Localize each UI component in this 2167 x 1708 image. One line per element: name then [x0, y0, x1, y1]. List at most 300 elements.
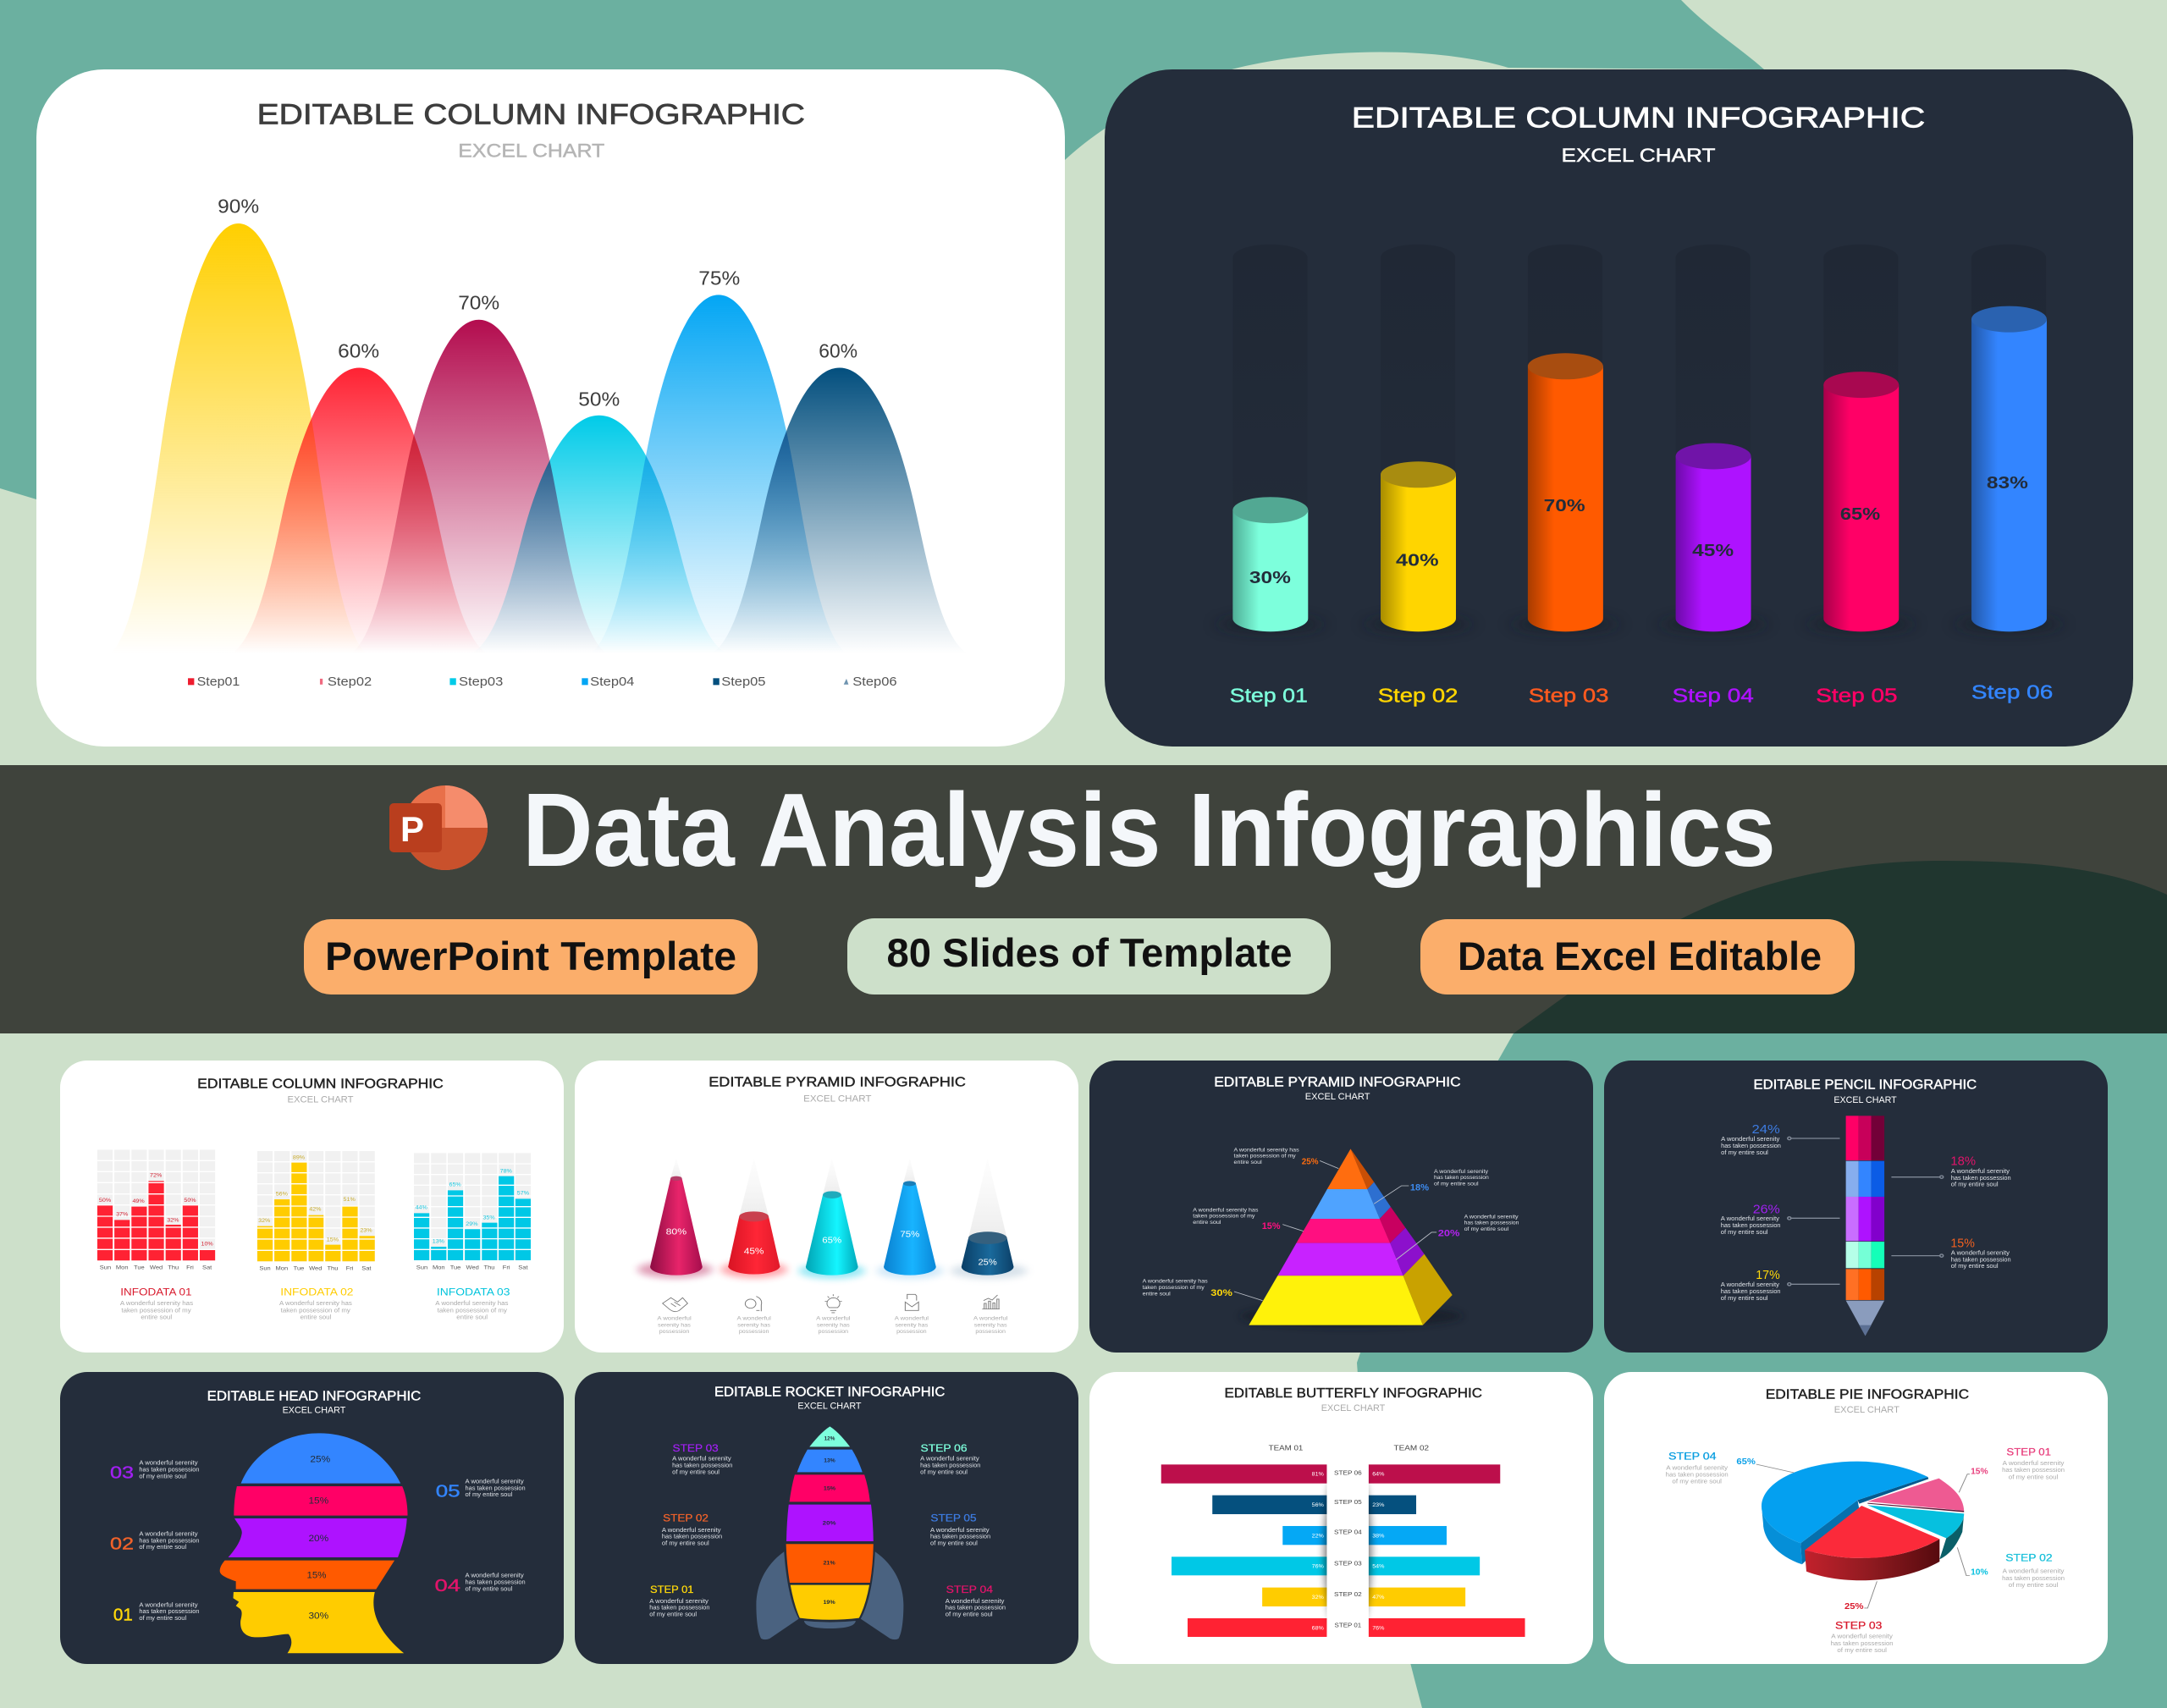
panel: weekly column charts [60, 1061, 564, 1353]
percent labels: 25% [1844, 1602, 1864, 1612]
cone: 65% [806, 1158, 858, 1275]
head: layered silhouette: 30% [308, 1612, 328, 1621]
icon: PowerPoint logo [389, 785, 488, 870]
descriptions: has taken possession [649, 1604, 709, 1611]
step headings: STEP 02 [663, 1512, 709, 1523]
chart: infodata 03: Thu [484, 1265, 495, 1270]
leader lines [1756, 1464, 1970, 1608]
descriptions: of my entire soul [662, 1540, 709, 1546]
subtitle: panel 2: EXCEL CHART [1561, 145, 1716, 166]
descriptions: has taken possession [139, 1537, 200, 1544]
text block: infodata 02 [279, 1286, 353, 1320]
rocket: body segments: 12% [824, 1435, 835, 1441]
cone shadows [637, 1261, 1028, 1279]
descriptions: A wonderful serenity [1831, 1633, 1893, 1639]
descriptions: of my entire soul [1672, 1478, 1722, 1485]
cylinder: step 02: 40% [1396, 551, 1439, 570]
subtitle: EXCEL CHART [1833, 1094, 1897, 1105]
captions under icons: serenity has [658, 1323, 691, 1328]
cylinder: step 05: 65% [1840, 504, 1880, 524]
text block: infodata 02: A wonderful serenity has [279, 1300, 352, 1307]
banner: title band [0, 765, 2167, 1033]
cylinder: step 06 [1971, 306, 2047, 631]
step headings [1668, 1446, 2053, 1631]
descriptions: has taken possession [2002, 1575, 2065, 1582]
text block: infodata 02: taken possession of my [281, 1307, 350, 1314]
panel: bell curve column chart [36, 69, 1065, 747]
descriptions: entire soul [1234, 1159, 1262, 1165]
chart: butterfly bars: 76% [1372, 1626, 1385, 1631]
descriptions: has taken possession [930, 1533, 990, 1540]
captions under icons: A wonderful [736, 1316, 771, 1321]
chart: butterfly bars: 47% [1372, 1595, 1385, 1601]
button: 80 Slides of Template [847, 918, 1331, 994]
percent labels: 30% [1210, 1287, 1232, 1298]
descriptions: A wonderful serenity [1951, 1249, 2010, 1256]
head: layered silhouette: 15% [306, 1571, 326, 1580]
cylinder shadows [1218, 615, 2060, 633]
panel: head chart [60, 1372, 564, 1664]
chart: butterfly bars: 68% [1312, 1626, 1324, 1631]
chart: butterfly bars: STEP 01 [1335, 1621, 1361, 1628]
chart: infodata 03: 44% [416, 1205, 427, 1210]
chart: butterfly bars: 81% [1312, 1472, 1324, 1477]
rocket: fins and nozzle [756, 1551, 903, 1639]
chart: infodata 03: Wed [466, 1265, 479, 1270]
descriptions: taken possession of my [1143, 1284, 1205, 1291]
chart: butterfly bars: STEP 04 [1334, 1528, 1362, 1535]
percent labels: 26% [1753, 1203, 1780, 1216]
descriptions: of my entire soul [1837, 1647, 1887, 1654]
background: lower teal shape [1357, 1033, 2167, 1708]
descriptions: has taken possession [920, 1462, 980, 1468]
percent labels: 65% [1736, 1457, 1756, 1467]
pie: 3D slices [1762, 1462, 1964, 1580]
descriptions: taken possession of my [1234, 1152, 1296, 1159]
chart: infodata 01: 72% [150, 1173, 162, 1178]
step labels: Step 01 [1230, 684, 1308, 706]
percent labels [1210, 1157, 1459, 1298]
descriptions: of my entire soul [139, 1544, 186, 1551]
rocket: body segments: 21% [823, 1559, 835, 1566]
descriptions: A wonderful serenity [139, 1601, 198, 1608]
subtitle: EXCEL CHART [288, 1094, 354, 1105]
legend: Step04 [590, 674, 634, 688]
captions under icons: possession [739, 1329, 769, 1335]
descriptions: has taken possession [139, 1608, 200, 1615]
chart: butterfly bars: 23% [1372, 1502, 1385, 1508]
panel: 3D cylinder column chart [1105, 69, 2133, 747]
chart: butterfly bars [1161, 1447, 1525, 1653]
chart: infodata 01: 50% [99, 1198, 111, 1204]
chart: infodata 02: Mon [276, 1266, 288, 1271]
head: layered silhouette: 20% [308, 1534, 328, 1544]
subtitle: EXCEL CHART [797, 1401, 862, 1411]
cylinder: step 03 [1528, 353, 1603, 631]
title: EDITABLE PIE INFOGRAPHIC [1766, 1386, 1969, 1402]
title: EDITABLE PYRAMID INFOGRAPHIC [1214, 1074, 1461, 1089]
panel: pencil chart [1604, 1061, 2108, 1353]
text block: infodata 02: entire soul [301, 1314, 332, 1320]
head: layered silhouette: 15% [308, 1496, 328, 1506]
step numbers [110, 1463, 460, 1624]
descriptions: A wonderful serenity [1721, 1281, 1779, 1288]
descriptions: A wonderful serenity [2003, 1460, 2064, 1467]
text block: infodata 03: INFODATA 03 [437, 1286, 510, 1298]
descriptions: of my entire soul [2009, 1582, 2059, 1589]
subtitle: EXCEL CHART [1321, 1402, 1386, 1413]
cone: 25%: 25% [979, 1258, 997, 1267]
rocket: body segments: 20% [823, 1519, 836, 1526]
cone: 75% [884, 1158, 936, 1275]
descriptions: has taken possession [1434, 1174, 1489, 1181]
captions under icons: serenity has [974, 1323, 1007, 1328]
captions under icons: serenity has [895, 1323, 929, 1328]
cylinder: step 04 [1676, 443, 1751, 631]
percent labels: 18% [1950, 1154, 1976, 1168]
step headings [650, 1442, 993, 1595]
connector lines [1788, 1137, 1944, 1286]
chart: infodata 02: Fri [346, 1266, 354, 1271]
descriptions: A wonderful serenity [946, 1598, 1004, 1605]
pyramid: layered 3D shape [1249, 1149, 1453, 1325]
captions under icons: A wonderful [973, 1316, 1008, 1321]
chart: infodata 01: Thu [168, 1265, 179, 1270]
percent labels [1752, 1122, 1976, 1282]
cylinder tracks [1232, 245, 2046, 617]
legend: Step06 [852, 674, 897, 688]
title: EDITABLE ROCKET INFOGRAPHIC [714, 1384, 945, 1399]
chart: infodata 02: 15% [327, 1237, 339, 1242]
chart: infodata 02: Wed [309, 1266, 323, 1271]
percent labels: 25% [1302, 1157, 1319, 1166]
chart: butterfly bars: STEP 05 [1334, 1498, 1362, 1506]
percent labels: 10% [1971, 1568, 1988, 1577]
chart: infodata 01: Mon [116, 1265, 129, 1270]
captions under icons: possession [896, 1329, 927, 1335]
descriptions: of my entire soul [466, 1491, 512, 1498]
text block: infodata 03: A wonderful serenity has [435, 1300, 509, 1307]
descriptions: has taken possession [466, 1485, 526, 1491]
chart: infodata 01: Sun [100, 1265, 111, 1270]
cone: 25% [962, 1158, 1013, 1275]
chart: infodata 01: 10% [201, 1242, 213, 1247]
percent labels: 20% [1438, 1228, 1459, 1238]
subtitle: EXCEL CHART [1305, 1091, 1370, 1102]
chart: infodata 02: Sun [259, 1266, 271, 1271]
descriptions: has taken possession [1464, 1219, 1519, 1226]
percent labels: 15% [1971, 1467, 1988, 1476]
chart: infodata 01: 37% [116, 1212, 128, 1217]
descriptions: of my entire soul [946, 1611, 993, 1617]
chart: infodata 02: 89% [293, 1155, 305, 1160]
chart: infodata 03: Sat [518, 1265, 528, 1270]
chart value labels: 60% [819, 339, 857, 361]
chart: infodata 02 [257, 1151, 375, 1271]
descriptions: A wonderful serenity [1434, 1168, 1488, 1175]
percent labels [1736, 1457, 1988, 1612]
step headings: STEP 01 [2006, 1446, 2051, 1457]
cylinder: step 05 [1823, 372, 1899, 631]
descriptions: A wonderful serenity [1951, 1168, 2010, 1175]
descriptions: has taken possession [1721, 1222, 1781, 1229]
descriptions: A wonderful serenity [1464, 1213, 1519, 1220]
title: EDITABLE BUTTERFLY INFOGRAPHIC [1224, 1385, 1482, 1401]
descriptions: of my entire soul [1951, 1181, 1999, 1187]
captions under icons: possession [659, 1329, 689, 1335]
step headings: STEP 01 [650, 1584, 693, 1595]
legend: Step02 [328, 674, 372, 688]
descriptions: A wonderful serenity [672, 1455, 731, 1462]
step labels: Step 05 [1816, 684, 1898, 706]
descriptions: entire soul [1143, 1290, 1171, 1297]
descriptions: of my entire soul [2009, 1474, 2059, 1480]
descriptions: A wonderful serenity [649, 1598, 709, 1605]
title: EDITABLE COLUMN INFOGRAPHIC [197, 1076, 444, 1091]
descriptions: has taken possession [1951, 1256, 2011, 1263]
captions under icons: serenity has [737, 1323, 771, 1328]
button: Data Excel Editable [1420, 919, 1855, 994]
panel: rocket chart [575, 1372, 1078, 1664]
descriptions: A wonderful serenity [466, 1572, 524, 1579]
chart: butterfly bars: 38% [1372, 1534, 1385, 1539]
captions under icons: A wonderful [816, 1316, 851, 1321]
chart: infodata 01: 32% [167, 1218, 179, 1223]
descriptions: has taken possession [1666, 1471, 1729, 1478]
panel: butterfly chart [1089, 1372, 1593, 1664]
descriptions: has taken possession [946, 1604, 1006, 1611]
button: Data Excel Editable: Data Excel Editable [1458, 934, 1822, 978]
step numbers: 01 [113, 1604, 133, 1624]
pencil: segmented column [1846, 1116, 1884, 1336]
descriptions: A wonderful serenity has [1234, 1146, 1299, 1153]
chart: infodata 02: Sat [361, 1266, 372, 1271]
chart: infodata 03: Fri [503, 1265, 510, 1270]
descriptions [649, 1455, 1006, 1617]
descriptions: has taken possession [466, 1579, 526, 1585]
icon: PowerPoint logo: P [400, 809, 424, 849]
chart value labels: 50% [578, 388, 620, 410]
descriptions: of my entire soul [672, 1468, 720, 1475]
percent labels: 15% [1262, 1220, 1280, 1231]
chart: infodata 01: Fri [186, 1265, 194, 1270]
subtitle: EXCEL CHART [1834, 1404, 1900, 1415]
descriptions [1721, 1136, 2011, 1302]
chart: infodata 01: Wed [150, 1265, 163, 1270]
descriptions [139, 1459, 526, 1622]
descriptions: A wonderful serenity [1721, 1136, 1779, 1143]
text block: infodata 01 [120, 1286, 193, 1320]
step numbers: 03 [110, 1463, 134, 1482]
team headers: TEAM 02 [1394, 1444, 1429, 1452]
chart: butterfly bars: 22% [1312, 1534, 1324, 1539]
descriptions: entire soul [1193, 1219, 1221, 1226]
chart: infodata 01: Sat [202, 1265, 212, 1270]
cone: 45% [728, 1158, 780, 1275]
cone: 65%: 65% [822, 1236, 841, 1245]
chart value labels: 70% [458, 291, 499, 314]
descriptions: A wonderful serenity [1721, 1215, 1779, 1222]
descriptions: of my entire soul [139, 1473, 186, 1479]
chart: infodata 02: Tue [294, 1266, 304, 1271]
descriptions: of my entire soul [649, 1611, 697, 1617]
descriptions: of my entire soul [930, 1540, 978, 1546]
panel: cone pyramid chart [575, 1061, 1078, 1353]
cylinder: step 06: 83% [1987, 473, 2028, 493]
title: EDITABLE HEAD INFOGRAPHIC [207, 1388, 421, 1403]
step headings: STEP 04 [946, 1584, 993, 1595]
chart: infodata 01: Tue [134, 1265, 145, 1270]
step headings: STEP 03 [673, 1442, 719, 1454]
descriptions: A wonderful serenity [139, 1459, 198, 1466]
chart: infodata 03: 35% [482, 1215, 495, 1220]
step headings: STEP 02 [2005, 1551, 2053, 1563]
step labels: Step 02 [1378, 684, 1458, 706]
descriptions: of my entire soul [920, 1468, 968, 1475]
chart value labels [218, 195, 857, 410]
text block: infodata 03: taken possession of my [438, 1307, 507, 1314]
descriptions: taken possession of my [1193, 1212, 1255, 1219]
chart: infodata 03: 78% [500, 1169, 512, 1174]
chart: infodata 03: 57% [517, 1191, 529, 1196]
descriptions: of my entire soul [139, 1615, 186, 1622]
text block: infodata 03 [435, 1286, 510, 1320]
title: EDITABLE PENCIL INFOGRAPHIC [1753, 1077, 1977, 1092]
rocket: body segments: 19% [823, 1599, 835, 1606]
button: PowerPoint Template [304, 919, 758, 994]
chart: infodata 02: 23% [360, 1228, 372, 1233]
team headers: TEAM 01 [1269, 1444, 1303, 1452]
step labels [1230, 680, 2053, 706]
chart: infodata 03: 13% [433, 1239, 444, 1244]
cone: 80% [650, 1158, 703, 1275]
chart: infodata 03: 65% [449, 1182, 461, 1187]
subtitle: EXCEL CHART [803, 1093, 872, 1104]
step labels: Step 04 [1672, 684, 1754, 706]
chart: butterfly bars: 32% [1312, 1595, 1324, 1601]
legend: Step03 [459, 674, 503, 688]
percent labels: 18% [1410, 1182, 1429, 1193]
title: panel 2 heading: EDITABLE COLUMN INFOGRAPHIC [1352, 101, 1925, 134]
descriptions [1666, 1460, 2065, 1654]
button: 80 Slides of Template: 80 Slides of Template [887, 930, 1292, 975]
captions under icons: serenity has [817, 1323, 850, 1328]
heading: Data Analysis Infographics: Data Analysis Infographics [522, 773, 1776, 889]
descriptions: A wonderful serenity has [1193, 1206, 1259, 1213]
descriptions: has taken possession [1721, 1288, 1781, 1295]
title: EDITABLE PYRAMID INFOGRAPHIC [709, 1074, 966, 1089]
panel: pyramid chart [1089, 1061, 1593, 1353]
step headings: STEP 05 [930, 1512, 977, 1523]
descriptions: A wonderful serenity [2003, 1568, 2064, 1574]
captions under icons [657, 1316, 1008, 1335]
percent labels: 15% [1950, 1237, 1975, 1250]
descriptions: has taken possession [662, 1533, 722, 1540]
chart: butterfly bars: STEP 02 [1334, 1590, 1362, 1598]
chart: infodata 02: Thu [327, 1266, 339, 1271]
step numbers: 05 [436, 1481, 460, 1501]
subtitle: EXCEL CHART [283, 1404, 346, 1415]
step labels: Step 06 [1971, 680, 2053, 702]
subtitle: panel 1: EXCEL CHART [458, 140, 604, 161]
descriptions: of my entire soul [1434, 1180, 1479, 1187]
descriptions: of my entire soul [1464, 1226, 1509, 1232]
rocket: body segments: 13% [824, 1457, 835, 1463]
cone: 75%: 75% [900, 1230, 920, 1239]
text block: infodata 03: entire soul [456, 1314, 488, 1320]
step headings: STEP 06 [921, 1442, 968, 1454]
chart: butterfly bars: 76% [1312, 1564, 1324, 1569]
chart: infodata 02: 42% [309, 1207, 322, 1212]
chart value labels: 75% [698, 267, 740, 289]
descriptions: A wonderful serenity [1666, 1464, 1728, 1471]
chart: butterfly bars: 64% [1372, 1472, 1385, 1477]
rocket: body segments: 15% [824, 1485, 836, 1491]
captions under icons: possession [975, 1329, 1006, 1335]
chart: infodata 03: 29% [466, 1221, 478, 1227]
chart value labels: 60% [338, 339, 379, 361]
text block: infodata 01: entire soul [141, 1314, 172, 1320]
descriptions: has taken possession [1951, 1175, 2011, 1182]
chart: infodata 02: 32% [258, 1218, 271, 1224]
descriptions: of my entire soul [1951, 1263, 1999, 1270]
text block: infodata 02: INFODATA 02 [280, 1286, 353, 1298]
cylinder: step 01: 30% [1249, 568, 1291, 587]
percent labels: 17% [1756, 1268, 1780, 1282]
legend: Step05 [721, 674, 765, 688]
icons: line icons under cones [663, 1294, 1000, 1313]
descriptions: of my entire soul [1721, 1229, 1768, 1236]
step numbers: 02 [110, 1534, 134, 1553]
descriptions: has taken possession [1721, 1143, 1781, 1149]
step headings: STEP 04 [1668, 1450, 1717, 1462]
descriptions: A wonderful serenity [930, 1527, 990, 1534]
text block: infodata 01: taken possession of my [121, 1307, 191, 1314]
descriptions: A wonderful serenity [662, 1527, 720, 1534]
captions under icons: possession [819, 1329, 848, 1335]
legend: Step01 [197, 674, 240, 688]
percent labels: 24% [1752, 1122, 1780, 1137]
chart: butterfly bars: STEP 06 [1334, 1468, 1362, 1476]
chart: infodata 03: Sun [416, 1265, 427, 1270]
descriptions: of my entire soul [466, 1585, 512, 1592]
title: panel 1 heading: EDITABLE COLUMN INFOGRAPHIC [257, 97, 805, 130]
chart: infodata 01: 50% [184, 1198, 196, 1204]
chart: overlapping bell curves [111, 223, 968, 653]
head: layered silhouette: 25% [310, 1454, 330, 1464]
button: PowerPoint Template: PowerPoint Template [325, 934, 736, 978]
descriptions: A wonderful serenity [920, 1455, 979, 1462]
descriptions [1143, 1146, 1519, 1297]
chart: butterfly bars: STEP 03 [1334, 1559, 1362, 1567]
panel: 3D pie chart [1604, 1372, 2108, 1664]
descriptions: has taken possession [2002, 1467, 2065, 1474]
cylinder: step 04: 45% [1692, 541, 1734, 560]
chart: infodata 01 [97, 1149, 215, 1270]
cylinder: step 02 [1381, 461, 1456, 631]
step labels: Step 03 [1529, 684, 1608, 706]
descriptions: A wonderful serenity [139, 1530, 198, 1537]
text block: infodata 01: A wonderful serenity has [120, 1300, 193, 1307]
captions under icons: A wonderful [895, 1316, 929, 1321]
descriptions: of my entire soul [1721, 1295, 1768, 1302]
chart: butterfly bars: 54% [1372, 1564, 1385, 1569]
cylinder: step 03: 70% [1544, 496, 1585, 515]
chart: infodata 01: 49% [132, 1198, 145, 1204]
step numbers: 04 [435, 1575, 460, 1595]
step headings: STEP 03 [1835, 1620, 1882, 1631]
chart: infodata 02: 51% [344, 1197, 356, 1203]
